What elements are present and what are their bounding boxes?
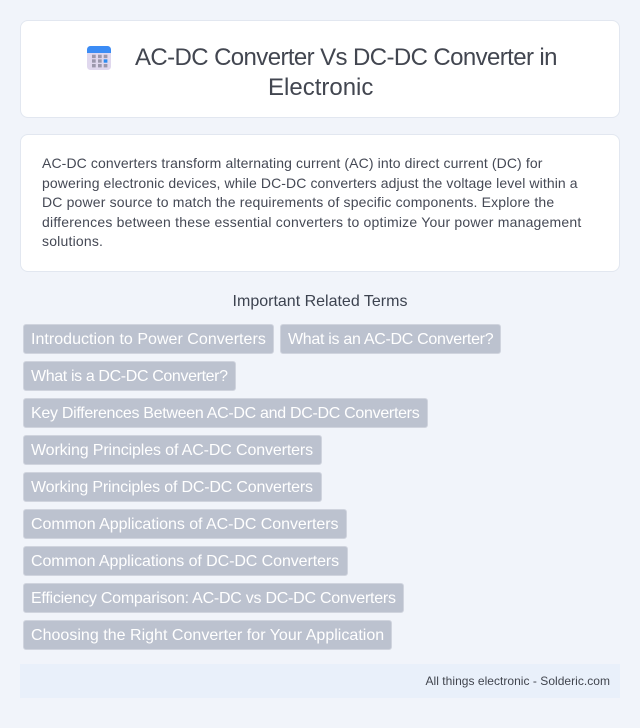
tag <box>23 583 404 613</box>
tag: Common Applications of AC-DC Converters <box>31 516 339 533</box>
footer <box>20 664 620 698</box>
tag: Efficiency Comparison: AC-DC vs DC-DC Converters <box>31 590 396 607</box>
tag: Working Principles of DC-DC Converters <box>31 479 313 496</box>
tag <box>23 620 392 650</box>
tag <box>23 509 347 539</box>
panel: title card <box>20 20 620 118</box>
tag <box>23 546 348 576</box>
tag <box>23 435 322 465</box>
title: Electronic <box>268 74 373 101</box>
tag: Working Principles of AC-DC Converters <box>31 442 313 459</box>
text: description: AC-DC converters transform alternating current (AC) into direct current (DC) for <box>42 155 542 171</box>
tag: Common Applications of DC-DC Converters <box>31 553 339 570</box>
panel: description <box>20 134 620 272</box>
tag <box>23 398 428 428</box>
title: AC-DC Converter Vs DC-DC Converter in <box>135 44 557 71</box>
tag: What is an AC-DC Converter? <box>288 331 493 348</box>
heading: related terms: Important Related Terms <box>233 293 407 310</box>
text: description: DC power source to match the requirements of specific components. Explore the <box>42 194 554 210</box>
text: description: differences between these essential converters to optimize Your power management <box>42 214 582 230</box>
title <box>135 44 557 101</box>
tag <box>23 361 236 391</box>
icon: calendar <box>87 46 111 70</box>
tag: Choosing the Right Converter for Your Application <box>31 627 384 644</box>
text: description: powering electronic devices, while DC-DC converters adjust the voltage level within a <box>42 175 578 191</box>
text: description: solutions. <box>42 233 103 249</box>
text: description <box>42 155 582 249</box>
tag: Introduction to Power Converters <box>31 331 266 348</box>
tag <box>23 472 322 502</box>
footer text: All things electronic - Solderic.com <box>426 674 610 688</box>
tag: What is a DC-DC Converter? <box>31 368 228 385</box>
tag <box>23 324 274 354</box>
tag: Key Differences Between AC-DC and DC-DC Converters <box>31 405 419 422</box>
tag <box>280 324 501 354</box>
